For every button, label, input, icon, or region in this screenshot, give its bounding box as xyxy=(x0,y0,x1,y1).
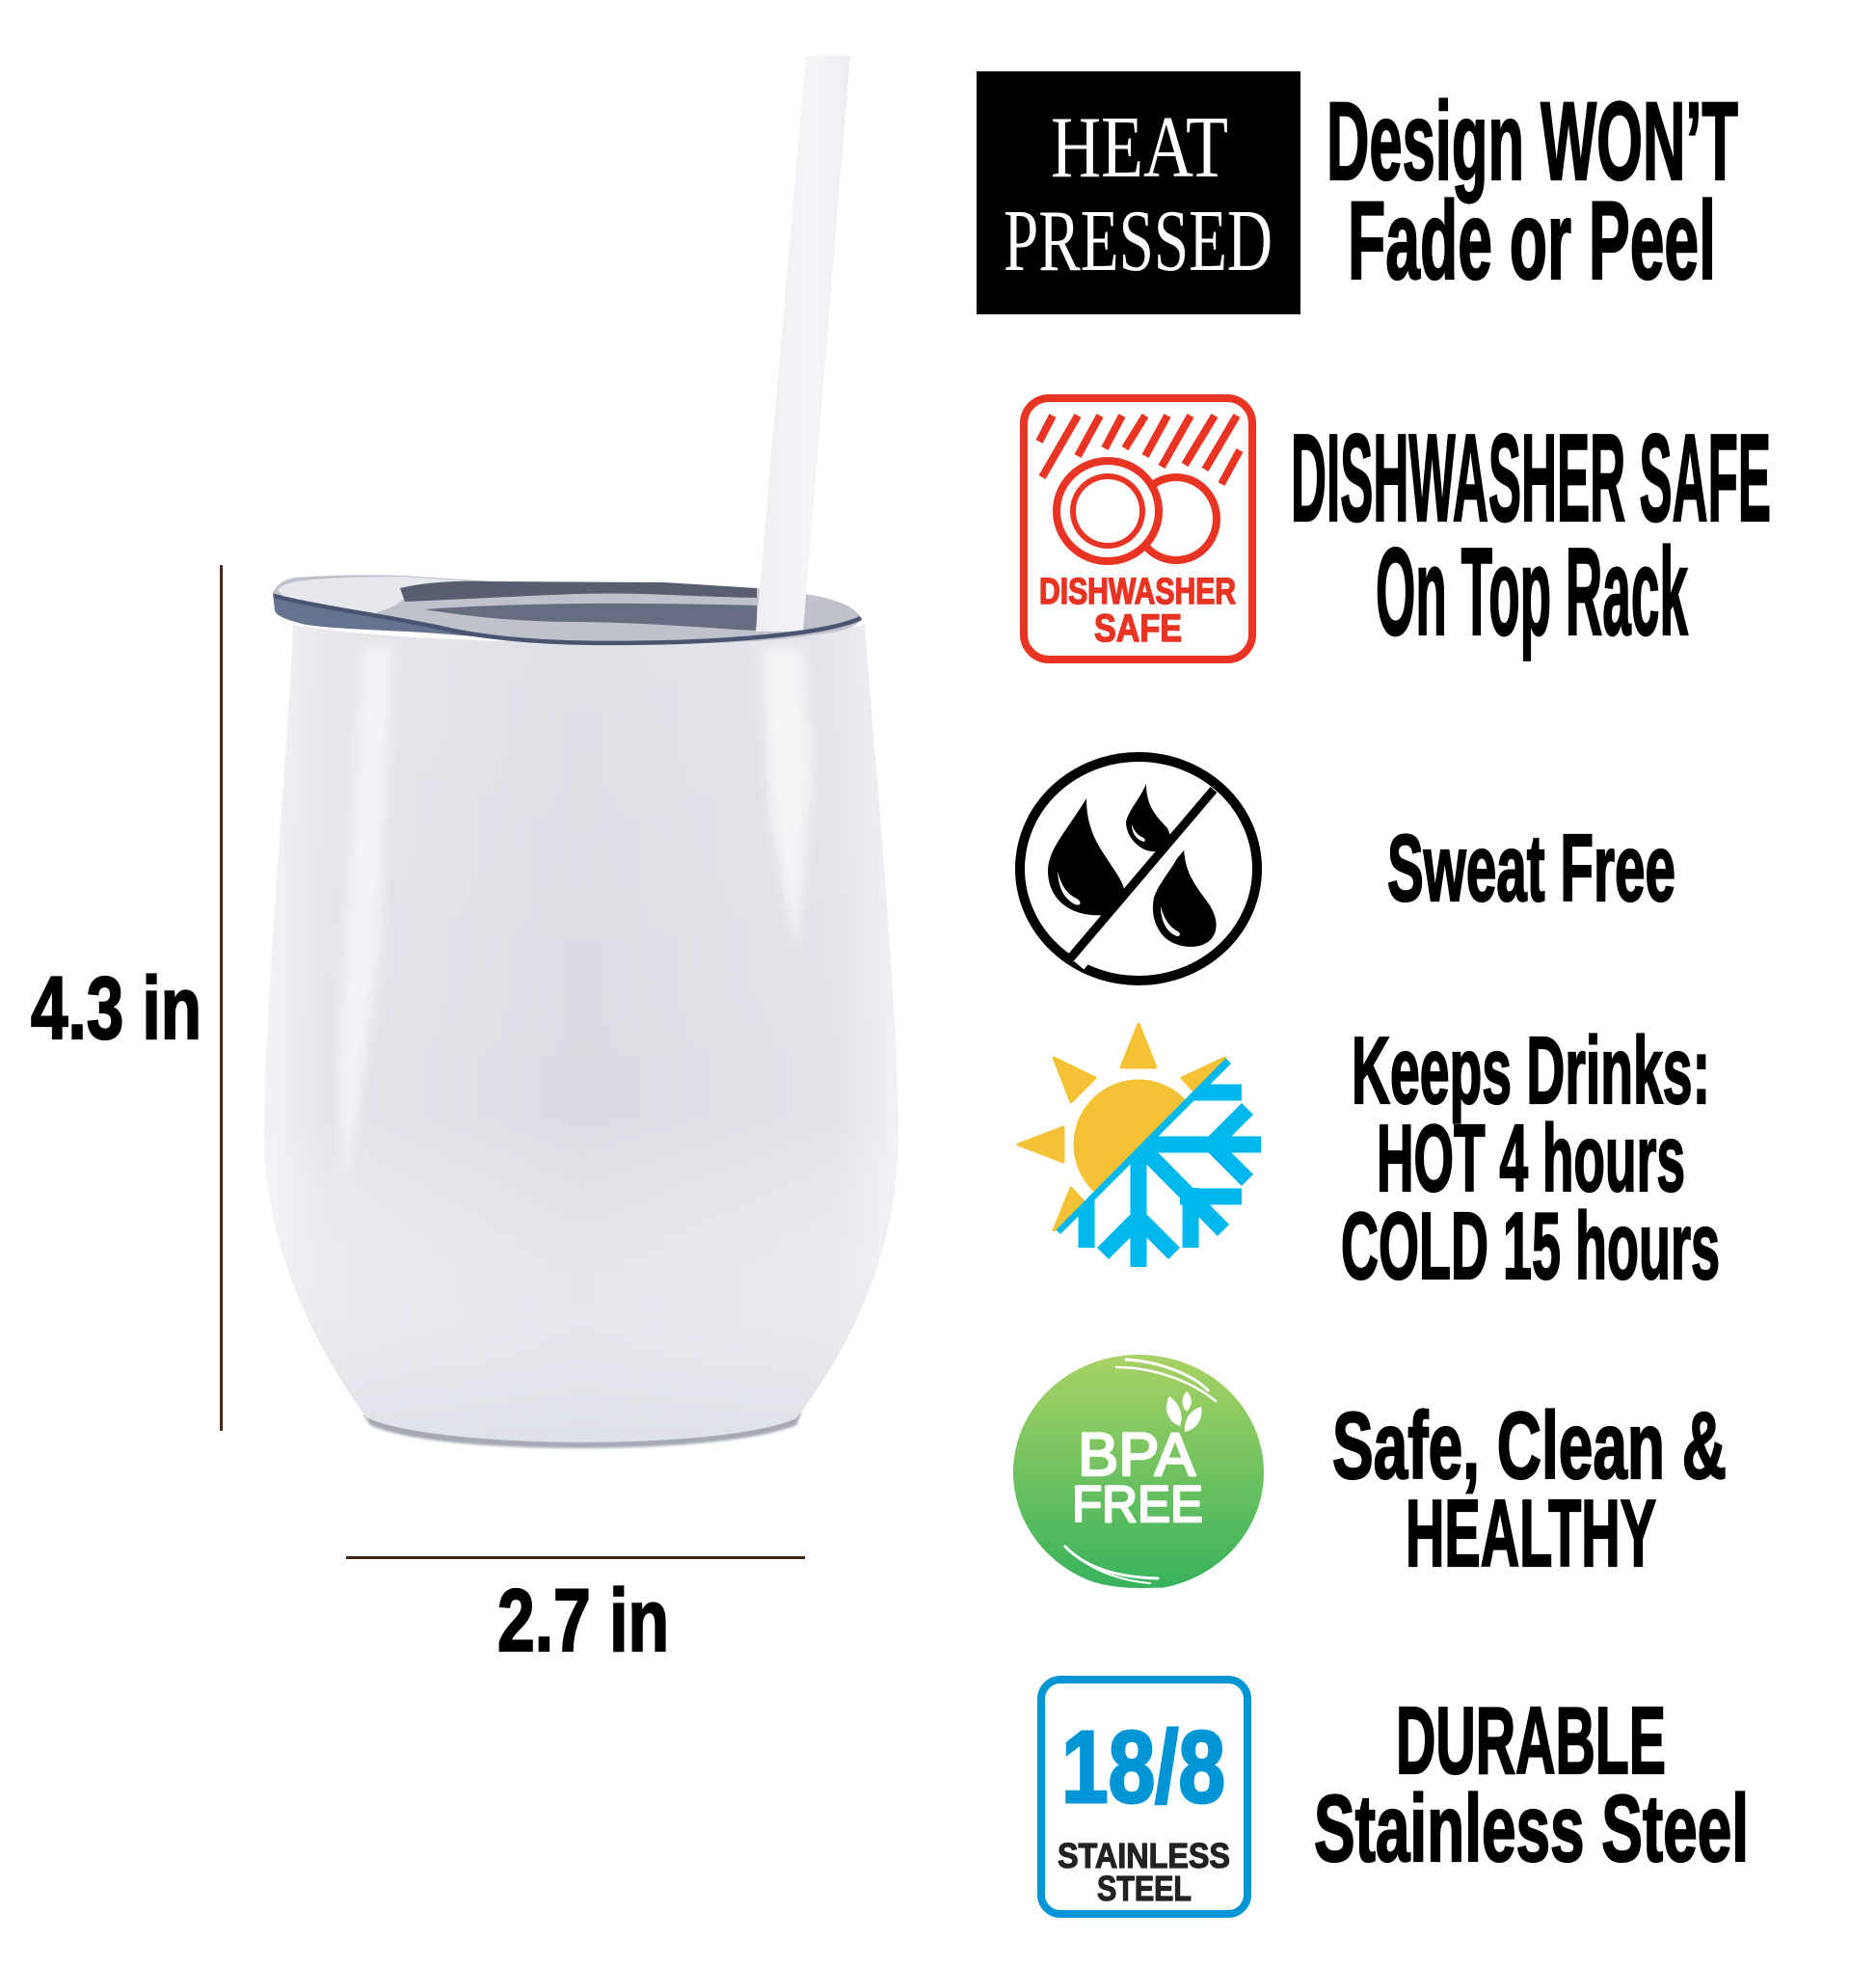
stainless caption: DURABLE xyxy=(1396,1687,1666,1793)
panel: keeps drinks xyxy=(1018,1017,1720,1299)
tumbler photo xyxy=(264,56,898,1448)
brush marks xyxy=(1063,1360,1229,1590)
keeps drinks caption xyxy=(1341,1017,1720,1299)
lid left tinted edge xyxy=(273,593,540,644)
icon label: SAFE xyxy=(1094,607,1182,650)
red frame xyxy=(1024,398,1252,660)
icon label: DISHWASHER xyxy=(1039,572,1236,612)
water drops xyxy=(1048,784,1217,947)
blue frame xyxy=(1041,1680,1247,1914)
stainless caption xyxy=(1314,1687,1749,1881)
panel: heat pressed xyxy=(977,71,1738,314)
plates xyxy=(1057,461,1217,561)
height label: 4.3 in xyxy=(31,959,201,1058)
panel: dishwasher safe xyxy=(1024,398,1771,661)
right highlight xyxy=(762,648,812,950)
no-sweat icon xyxy=(1020,757,1257,981)
width dimension line xyxy=(346,1556,805,1559)
prohibition ring xyxy=(1020,757,1257,981)
18/8 text: 18/8 xyxy=(1061,1710,1225,1824)
tumbler body xyxy=(264,625,898,1442)
badge text: HEAT xyxy=(1051,98,1228,196)
sun and snowflake icon xyxy=(1018,1024,1261,1267)
BPA FREE text: BPA xyxy=(1078,1421,1195,1489)
tumbler base shadow xyxy=(362,1412,802,1448)
slash xyxy=(1071,790,1219,965)
18/8 icon xyxy=(1041,1680,1247,1914)
bpa caption: HEALTHY xyxy=(1406,1480,1656,1586)
drop highlights xyxy=(1058,824,1180,936)
straw xyxy=(756,56,850,632)
panel: stainless steel xyxy=(1041,1680,1749,1914)
inner dark band xyxy=(424,604,757,631)
panel: sweat free xyxy=(1020,757,1675,981)
width label: 2.7 in xyxy=(497,1572,669,1670)
black badge xyxy=(977,71,1300,314)
sun xyxy=(1018,1024,1225,1230)
back dark band xyxy=(400,581,757,602)
badge text xyxy=(1004,98,1273,289)
stainless steel label xyxy=(1058,1836,1230,1908)
water lines xyxy=(1039,416,1240,484)
lid front rim xyxy=(274,596,861,643)
green disc xyxy=(1013,1355,1264,1590)
heat pressed caption xyxy=(1327,80,1738,303)
badge text: PRESSED xyxy=(1004,192,1273,289)
dishwasher caption xyxy=(1291,409,1771,661)
lid highlight xyxy=(278,577,472,617)
leaves xyxy=(1166,1391,1201,1432)
bpa caption xyxy=(1332,1392,1727,1586)
bpa icon xyxy=(1013,1355,1264,1590)
body lighter lower tint xyxy=(264,625,898,1442)
snowflake xyxy=(1055,1058,1261,1267)
sweat free caption: Sweat Free xyxy=(1387,815,1675,921)
BPA FREE text xyxy=(1072,1421,1203,1533)
left highlight xyxy=(339,648,393,1196)
icon label xyxy=(1039,572,1236,650)
panel: bpa free xyxy=(1013,1355,1727,1590)
height dimension line xyxy=(220,565,223,1431)
stainless steel label: STEEL xyxy=(1097,1869,1192,1908)
stainless steel label: STAINLESS xyxy=(1058,1836,1230,1875)
BPA FREE text: FREE xyxy=(1072,1476,1203,1533)
lid xyxy=(273,56,862,645)
dishwasher icon xyxy=(1024,398,1252,660)
lid clear body xyxy=(273,575,862,645)
